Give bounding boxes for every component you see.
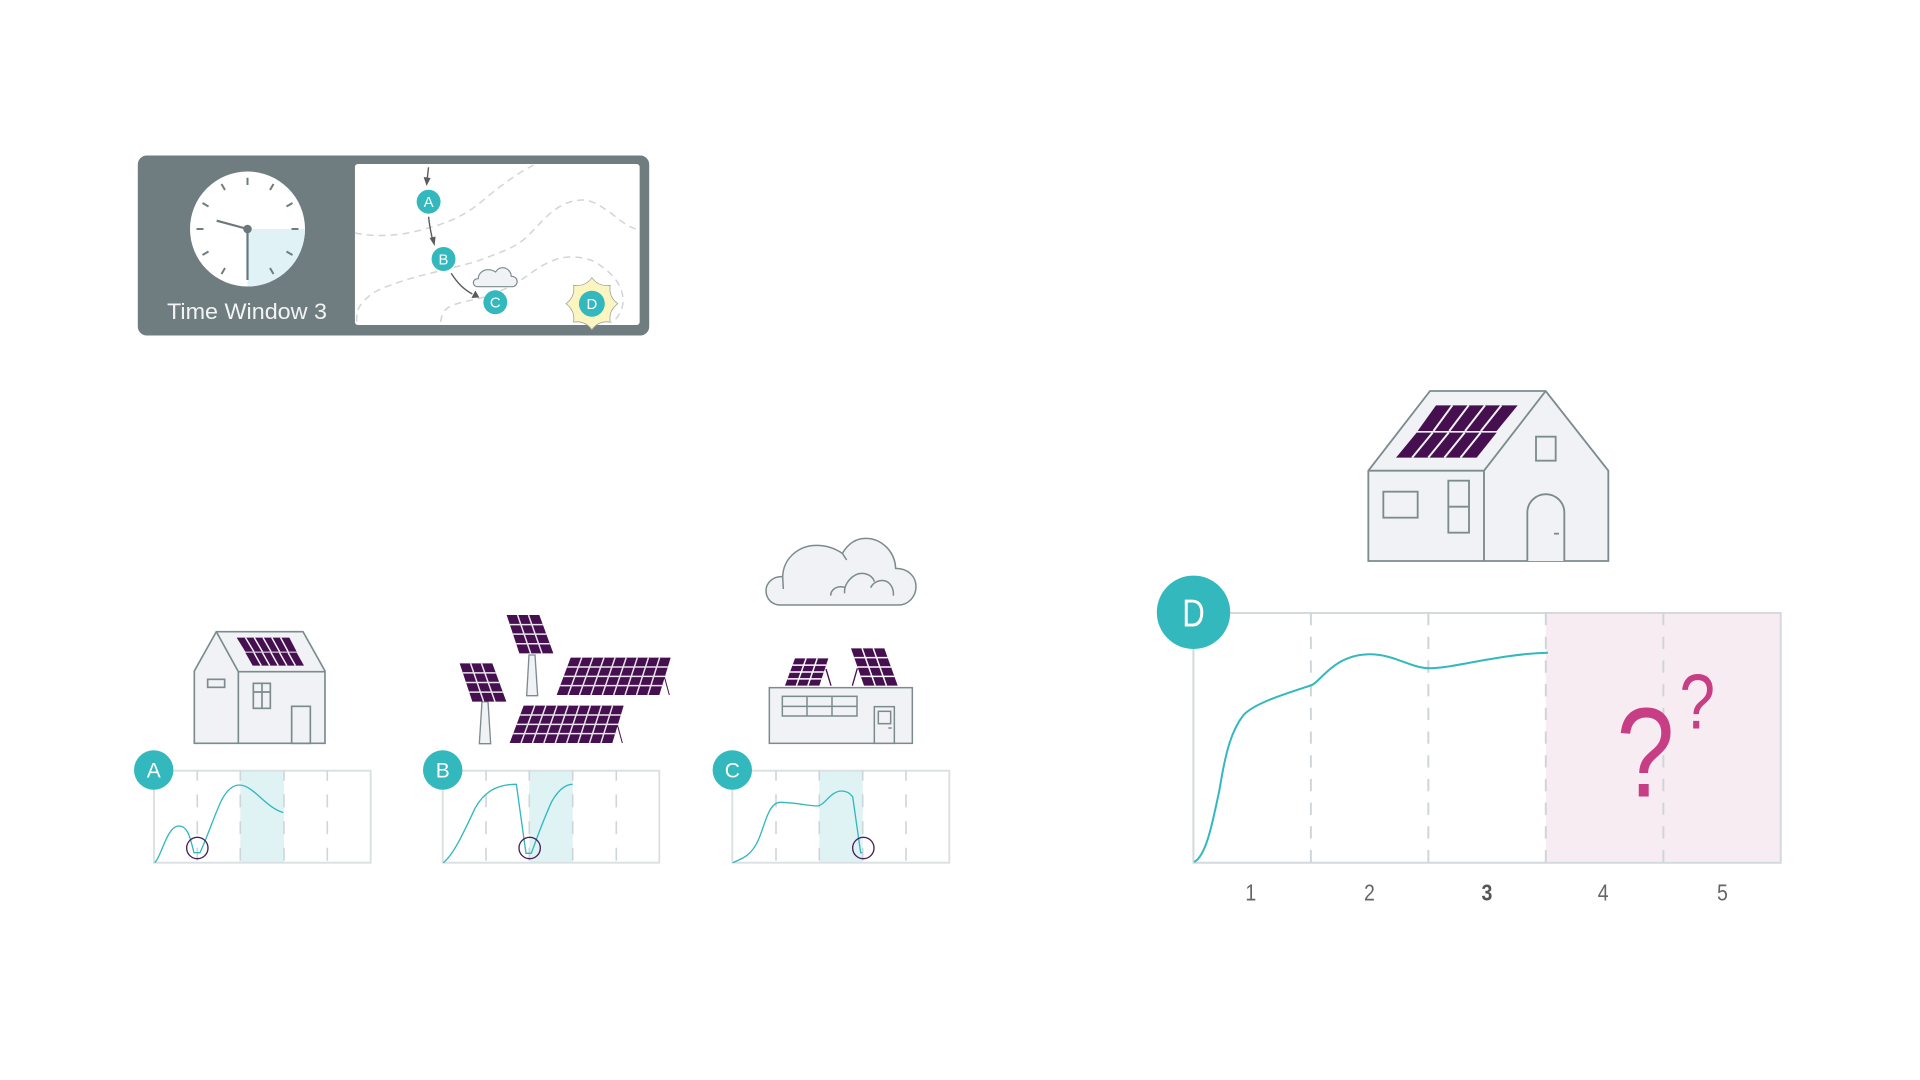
small question mark: ? [1680, 658, 1715, 746]
badge B [423, 750, 462, 790]
badge D: D [1182, 592, 1205, 635]
array 2 [510, 706, 624, 743]
tracker panel 1 [507, 615, 553, 653]
icon: house A [194, 632, 325, 743]
chart C [732, 771, 949, 863]
map marker D: D [586, 296, 597, 313]
axis labels: 2 [1364, 880, 1375, 906]
icon: large house [1368, 391, 1608, 561]
icon: commercial building [769, 648, 912, 743]
badge C: C [725, 760, 740, 782]
arrow: into A [424, 167, 431, 186]
badge C [713, 750, 752, 790]
solar panels [237, 638, 304, 666]
icon: clock [190, 172, 305, 286]
panel: site A [134, 632, 371, 863]
map marker C [483, 290, 507, 314]
map marker B [432, 247, 455, 271]
big question mark: ? [1617, 682, 1674, 824]
icon: solar field [460, 615, 671, 744]
panel: site B [423, 615, 671, 863]
axis labels: 3 [1482, 880, 1493, 906]
arrow: B to C [451, 273, 479, 298]
chart frame and curve [1193, 613, 1781, 863]
icon: small cloud [473, 268, 517, 287]
arrow: A to B [429, 217, 436, 246]
badge A [134, 750, 173, 790]
axis labels: 5 [1717, 880, 1728, 906]
tracker panel 2 [460, 663, 506, 702]
panel: site D [1157, 391, 1781, 906]
chart B [443, 771, 659, 863]
icon: cloud [766, 538, 916, 605]
map marker C: C [490, 295, 501, 312]
badge A: A [147, 760, 161, 782]
left roof panel [785, 658, 831, 686]
axis labels: 4 [1598, 880, 1609, 906]
icon: sun [566, 278, 618, 330]
map marker D [579, 291, 605, 317]
badge B: B [436, 760, 450, 782]
axis labels [1245, 880, 1728, 906]
map panel [355, 164, 640, 330]
panel: site C [713, 538, 949, 863]
solar panels [1396, 405, 1518, 458]
panel background [138, 156, 649, 336]
tracker pole 1 [527, 655, 538, 696]
chart A [154, 771, 371, 863]
tracker pole 2 [479, 702, 491, 744]
array 1 [557, 658, 671, 695]
map marker B: B [439, 251, 449, 268]
map marker A: A [424, 194, 434, 211]
clock caption: Time Window 3 [167, 299, 327, 324]
chart D [1193, 613, 1781, 863]
building body [769, 688, 912, 743]
panel: time window header [138, 156, 649, 336]
right roof panel [851, 648, 898, 686]
map marker A [417, 190, 441, 214]
badge D [1157, 576, 1230, 649]
axis labels: 1 [1245, 880, 1256, 906]
